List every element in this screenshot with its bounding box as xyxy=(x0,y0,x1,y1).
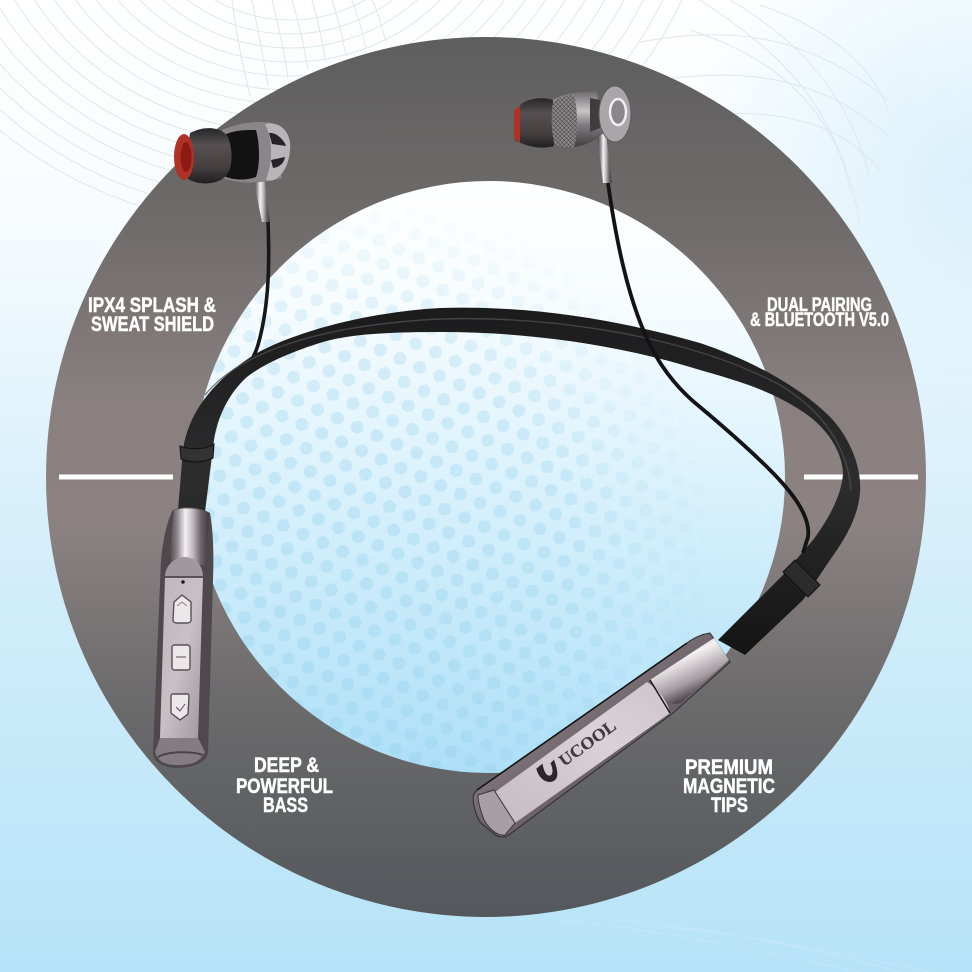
feature label: magnetic tips: TIPS xyxy=(711,794,748,817)
feature label: IPX4 xyxy=(88,294,216,336)
volume up button xyxy=(173,595,191,623)
inner circle with dot pattern xyxy=(202,181,785,773)
feature label: dual pairing xyxy=(750,295,889,331)
feature label: bass: POWERFUL xyxy=(236,775,333,798)
red ear tip xyxy=(514,106,520,143)
feature label: magnetic tips xyxy=(683,756,775,817)
end cap xyxy=(478,790,515,835)
neckband xyxy=(178,308,860,655)
divider line left xyxy=(59,474,173,480)
feature label: dual pairing: & BLUETOOTH V5.0 xyxy=(750,310,889,331)
volume down button xyxy=(171,694,189,720)
status dot xyxy=(181,580,185,584)
band sleeve right xyxy=(783,560,820,597)
left earbud cable xyxy=(240,222,269,378)
tip plate xyxy=(495,682,670,823)
feature label: bass: DEEP & xyxy=(254,754,319,777)
feature label: IPX4: SWEAT SHIELD xyxy=(91,313,214,336)
feature label: bass: BASS xyxy=(263,794,308,817)
left earbud xyxy=(174,122,290,222)
chrome collar xyxy=(650,638,729,704)
feature label: magnetic tips: PREMIUM xyxy=(685,756,773,779)
feature label: dual pairing: DUAL PAIRING xyxy=(767,295,872,316)
right earbud xyxy=(514,86,631,183)
red ear tip xyxy=(174,134,194,180)
feature label: bass xyxy=(236,754,333,817)
right magnetic tip module xyxy=(473,633,730,837)
right earbud cable xyxy=(608,183,808,553)
play button xyxy=(172,645,190,670)
feature label: magnetic tips: MAGNETIC xyxy=(683,775,775,798)
brand name: UCOOL xyxy=(555,716,620,770)
divider line right xyxy=(804,474,918,480)
knurled band xyxy=(552,95,577,147)
face ring xyxy=(610,99,626,125)
feature label: IPX4: IPX4 SPLASH & xyxy=(88,294,216,317)
left control module xyxy=(153,507,213,768)
band sleeve left xyxy=(180,444,214,462)
logo mark xyxy=(535,759,559,784)
